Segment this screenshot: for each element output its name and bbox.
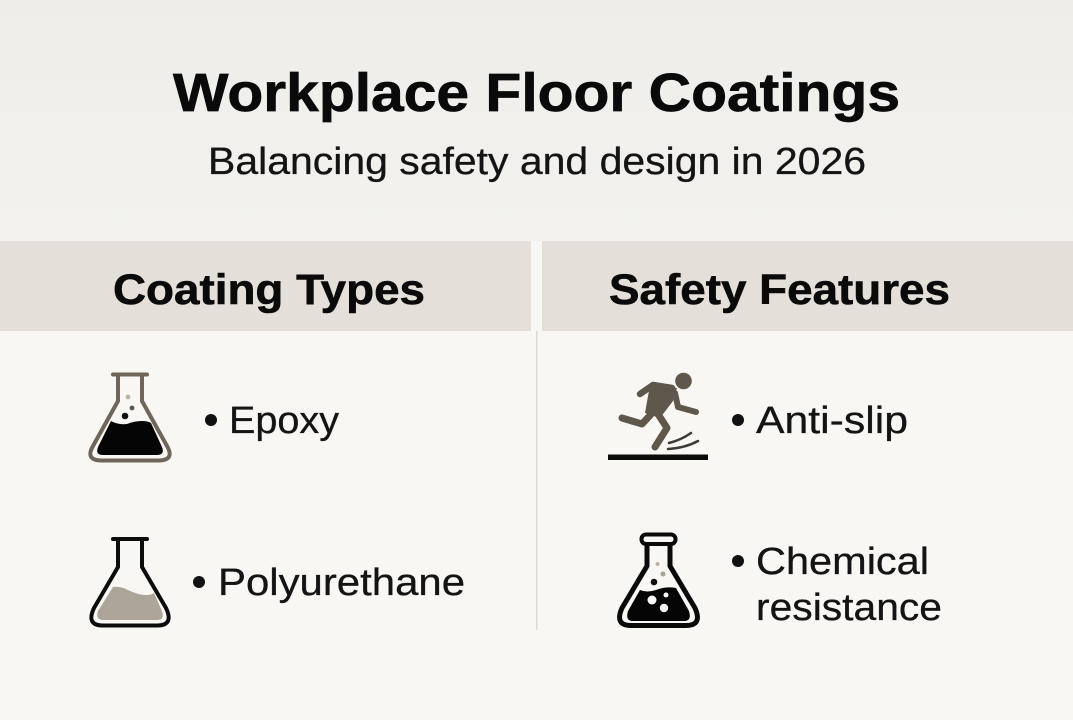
icon: slipping person [608,373,708,460]
title: Workplace Floor Coatings [173,63,900,123]
list item: epoxy: Epoxy [229,400,339,442]
list item: polyurethane: Polyurethane [218,562,465,604]
icon: polyurethane flask [91,539,169,626]
header background [0,0,1073,241]
heading band: coating types [0,241,531,331]
heading: safety features: Safety Features [609,266,950,314]
icon: epoxy flask [90,374,170,460]
list item: chemical resistance: resistance [756,587,942,629]
heading: coating types: Coating Types [113,266,425,314]
list item: anti-slip: Anti-slip [756,400,908,442]
panel: coating types [0,241,531,626]
panel: safety features [542,241,1073,629]
icon: chemical flask [620,534,697,626]
heading band: safety features [542,241,1073,331]
list item: chemical resistance [732,541,942,629]
list item: chemical resistance: Chemical [756,541,929,583]
subtitle: Balancing safety and design in 2026 [208,141,866,183]
